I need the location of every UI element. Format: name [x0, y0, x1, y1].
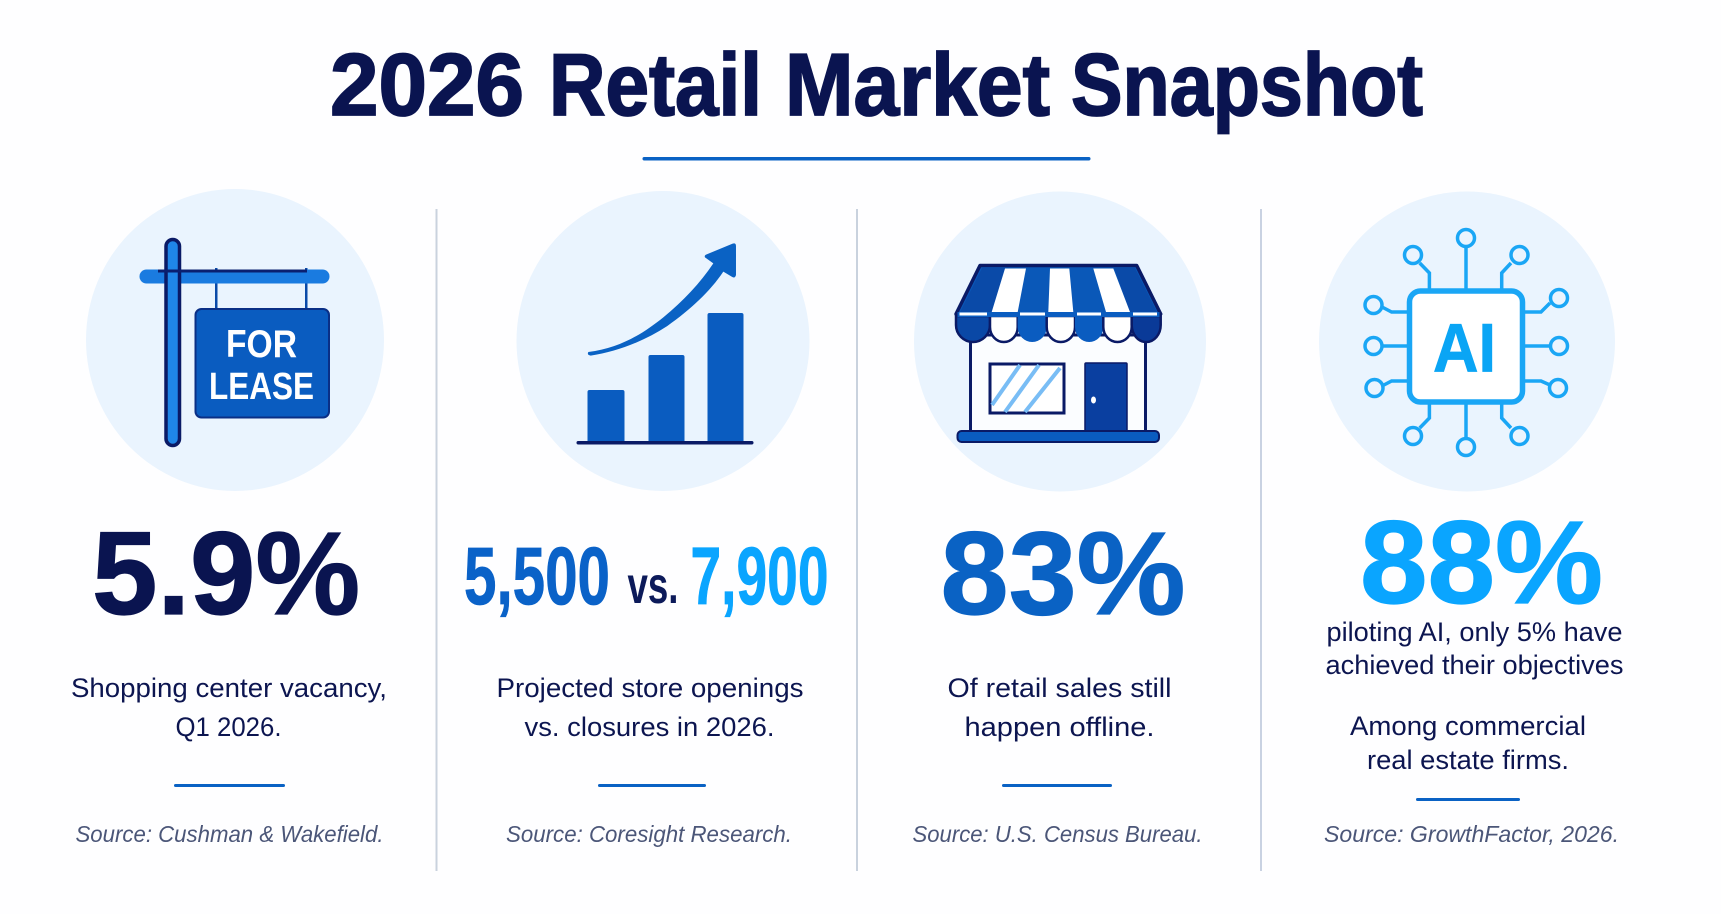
source: GrowthFactor: Source: GrowthFactor, 2026.: [1324, 821, 1619, 847]
description: AI pilots objectives: piloting AI, only 5% have: [1326, 617, 1622, 647]
icon circle: storefront: [914, 192, 1206, 492]
title: Snapshot: [1071, 35, 1423, 134]
title underline: [642, 157, 1090, 160]
description: commercial real estate firms: Among commercial: [1350, 711, 1586, 741]
description: AI pilots objectives: achieved their objectives: [1326, 650, 1624, 680]
panel: AI pilots: [1319, 192, 1624, 847]
source: U.S. Census Bureau: Source: U.S. Census Bureau.: [912, 821, 1202, 847]
stat: 88%: 88%: [1360, 497, 1603, 629]
description: openings vs closures: Projected store openings: [496, 673, 804, 703]
icon circle: AI: [1319, 192, 1615, 492]
chip label: AI: AI: [1433, 310, 1496, 386]
icon: bar chart with rising arrow: [576, 243, 754, 444]
description: vacancy: [71, 673, 387, 742]
description: offline sales: Of retail sales still: [948, 673, 1172, 703]
description: AI pilots objectives: [1326, 617, 1624, 680]
icon: storefront: [956, 266, 1161, 442]
description: vacancy: Q1 2026.: [176, 712, 282, 742]
panel: store openings vs closures: [464, 191, 828, 847]
stat: 5,500 vs. 7,900: vs.: [628, 557, 678, 615]
title: [330, 35, 1423, 134]
panel: shopping center vacancy: [71, 189, 387, 847]
title: Market: [785, 35, 1050, 134]
title: 2026: [330, 35, 524, 134]
stat: 83%: 83%: [940, 508, 1186, 640]
source: Cushman & Wakefield: Source: Cushman & Wakefield.: [76, 821, 384, 847]
description: openings vs closures: vs. closures in 2026.: [524, 712, 774, 742]
description: commercial real estate firms: [1350, 711, 1586, 775]
icon: AI chip: [1365, 230, 1568, 456]
description: commercial real estate firms: real estate firms.: [1367, 745, 1569, 775]
sign text: FOR: FOR: [226, 323, 297, 366]
description: openings vs closures: [496, 673, 804, 742]
panel: retail sales offline: [912, 192, 1206, 847]
sign text: LEASE: LEASE: [209, 366, 314, 408]
stat: 5,500 vs. 7,900: 7,900: [690, 531, 828, 622]
stat: 5,500 vs. 7,900: 5,500: [464, 531, 610, 622]
source: Coresight Research: Source: Coresight Research.: [506, 821, 792, 847]
icon circle: vacancy: [86, 189, 384, 491]
icon circle: growth: [516, 191, 810, 491]
icon: for lease sign: [140, 240, 330, 446]
stat: 5,500 vs. 7,900: [464, 531, 828, 622]
description: vacancy: Shopping center vacancy,: [71, 673, 387, 703]
description: offline sales: [948, 673, 1172, 742]
stat: 5.9%: 5.9%: [92, 508, 360, 640]
title: Retail: [549, 35, 762, 134]
description: offline sales: happen offline.: [964, 712, 1154, 742]
